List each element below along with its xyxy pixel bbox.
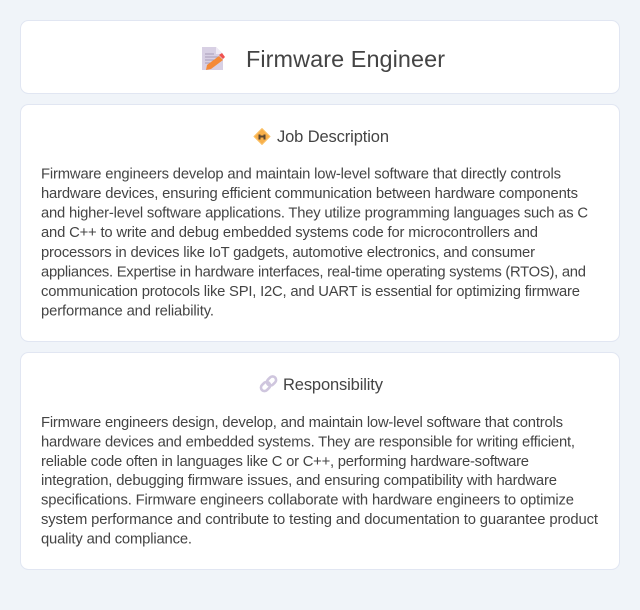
heading: job description: Job Description xyxy=(277,128,389,146)
text block: job description body: and higher-level software applications. They utilize programming languages such as C xyxy=(41,206,588,222)
title text: Firmware Engineer xyxy=(246,46,445,72)
text block: responsibility body: Firmware engineers design, develop, and maintain low-level software that controls xyxy=(41,415,563,431)
icon: document with pencil xyxy=(202,47,225,70)
text block: responsibility body: system performance and contribute to testing and documentation to guarantee product xyxy=(41,512,598,528)
text block: responsibility body: reliable code often in languages like C or C++, performing hardware-software xyxy=(41,454,529,470)
panel: responsibility xyxy=(20,352,620,570)
text block: job description body: hardware devices, ensuring efficient communication between hardware components xyxy=(41,186,578,202)
text block: responsibility body: hardware devices and embedded systems. They are responsible for writing efficient, xyxy=(41,434,575,450)
text block: job description body: Firmware engineers develop and maintain low-level software that directly controls xyxy=(41,166,561,182)
text block: responsibility body: integration, debugging firmware issues, and ensuring compatibility with hardware xyxy=(41,473,557,489)
text block: job description body xyxy=(41,166,588,320)
text block: job description body: appliances. Expertise in hardware interfaces, real-time operating systems (RTOS), and xyxy=(41,264,586,280)
icon: orange diamond xyxy=(254,128,270,144)
text block: responsibility body: quality and compliance. xyxy=(41,531,192,547)
panel: title xyxy=(20,20,620,94)
text block: job description body: performance and reliability. xyxy=(41,304,214,320)
icon: chain link xyxy=(259,375,278,393)
text block: job description body: and C++ to write and debug embedded systems code for microcontrollers and xyxy=(41,225,538,241)
panel: job description xyxy=(20,104,620,342)
text block: responsibility body xyxy=(41,415,598,547)
text block: job description body: processors in devices like IoT gadgets, automotive electronics, and consumer xyxy=(41,245,535,261)
heading: responsibility: Responsibility xyxy=(283,376,384,394)
text block: responsibility body: specifications. Firmware engineers collaborate with hardware engineers to optimize xyxy=(41,493,574,509)
text block: job description body: communication protocols like SPI, I2C, and UART is essential for optimizing firmware xyxy=(41,284,580,300)
